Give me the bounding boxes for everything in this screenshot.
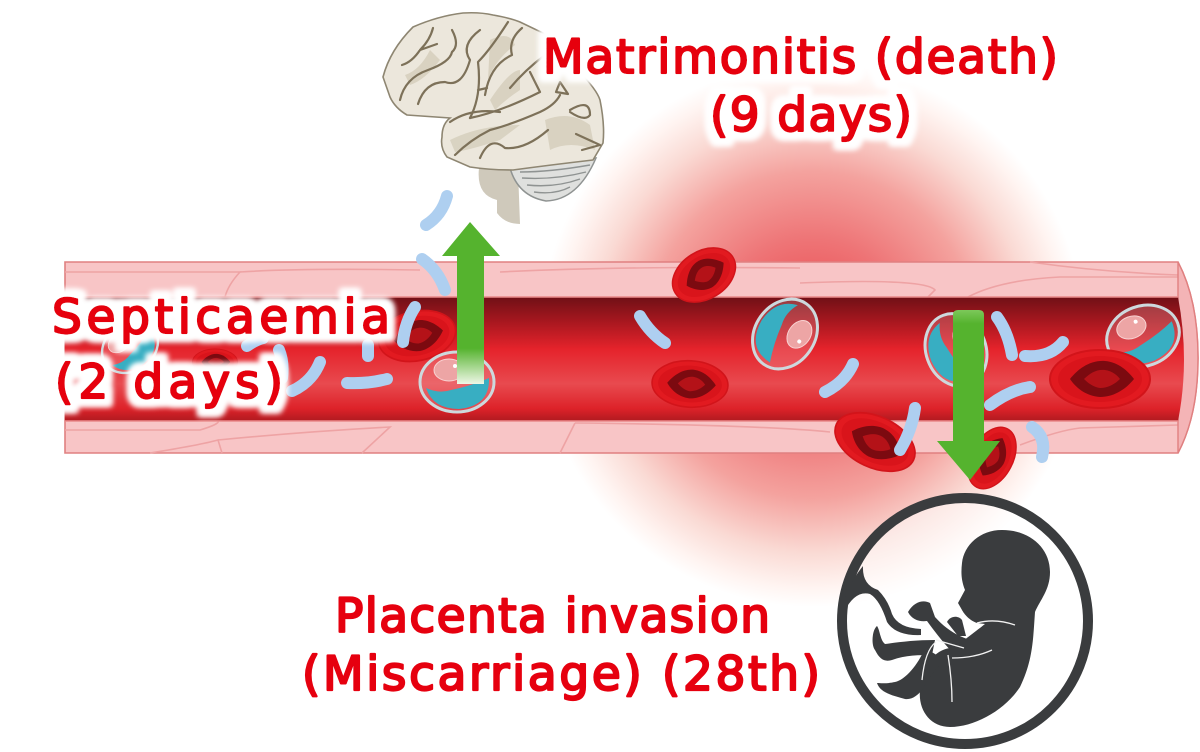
wall cell lines — [65, 262, 1178, 453]
label: days to matrimonitis: (9 days) — [710, 88, 912, 143]
brainstem — [479, 168, 520, 224]
icon: fetus in womb — [842, 498, 1088, 744]
umbilical cord — [842, 566, 921, 635]
red blood cell: faded — [192, 349, 238, 375]
red blood cell: left — [374, 304, 460, 368]
label: matrimonitis — [543, 30, 1058, 143]
fetus arm — [908, 601, 970, 655]
cerebrum — [383, 13, 604, 170]
fetus upper leg — [873, 626, 935, 661]
label: days to septicaemia: (2 days) — [55, 355, 283, 410]
fetus body highlights — [922, 621, 1015, 702]
label: miscarriage: (Miscarriage) (28th) — [302, 647, 820, 702]
womb ring — [842, 498, 1088, 744]
end cap — [1178, 262, 1198, 453]
red blood cell: bottom escaping — [826, 401, 924, 483]
label: septicaemia — [52, 290, 390, 410]
red blood cell: center — [651, 359, 729, 409]
vessel outer wall — [65, 262, 1198, 453]
bacteria — [247, 196, 1063, 457]
arrow: up to brain — [442, 222, 500, 384]
cerebrum folds — [400, 22, 600, 158]
label: placenta invasion: Placenta invasion — [335, 589, 770, 644]
label: placenta invasion — [302, 589, 820, 702]
red blood cell: bottom near arrow — [958, 419, 1026, 497]
white blood cell: right — [1098, 295, 1188, 377]
red blood cell: escaping top — [663, 237, 745, 313]
label: matrimonitis: Matrimonitis (death) — [543, 30, 1058, 85]
label: septicaemia: Septicaemia — [52, 290, 390, 345]
white blood cell: near down arrow — [915, 305, 997, 395]
lumen — [65, 297, 1184, 421]
fetus head and torso — [920, 530, 1050, 727]
red inflammation glow — [530, 55, 1095, 615]
icon: brain — [383, 13, 604, 224]
red blood cell: right — [1050, 350, 1150, 408]
white blood cell: far left — [92, 310, 168, 384]
white blood cell: center — [739, 286, 831, 382]
fetus second hand — [947, 617, 966, 636]
cerebrum shading — [405, 36, 595, 152]
arrow: down to fetus — [937, 310, 1000, 480]
blood vessel — [65, 262, 1198, 453]
fetus lower leg — [877, 648, 945, 699]
cerebellum — [510, 158, 596, 201]
white blood cell: left — [420, 352, 494, 412]
